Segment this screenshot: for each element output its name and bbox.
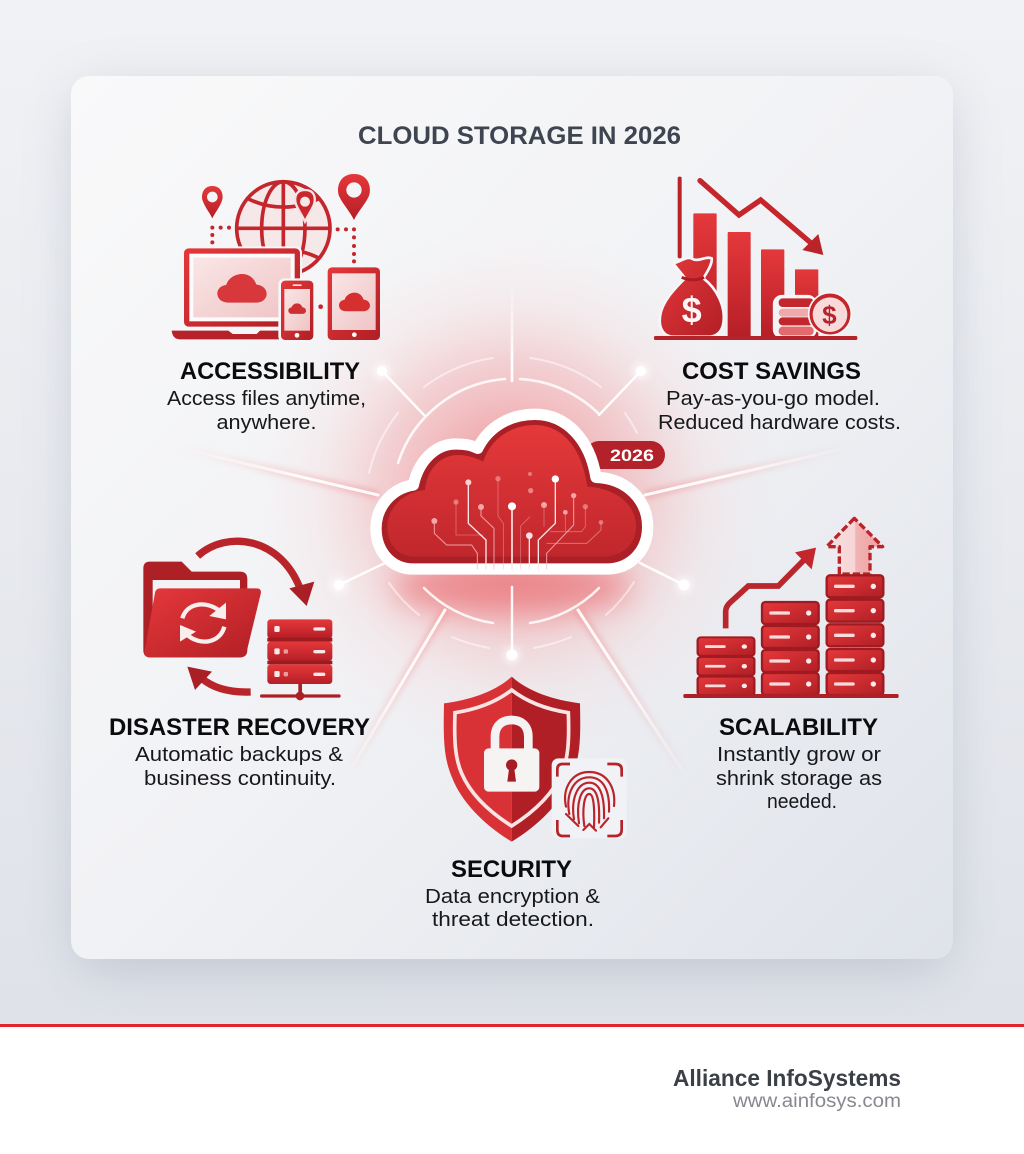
text: security description (425, 885, 600, 931)
globe (237, 182, 330, 275)
laptop (182, 246, 302, 329)
growth arrow (726, 560, 804, 628)
footer brand name: Alliance InfoSystems (673, 1065, 901, 1091)
icon: cost savings chart (654, 177, 857, 340)
server stack (267, 619, 332, 684)
heading: cost savings: COST SAVINGS (682, 358, 861, 385)
left ray (179, 448, 378, 495)
lower-right long ray (578, 610, 682, 770)
lower-left long ray (352, 610, 445, 767)
main card (71, 76, 953, 959)
text: cost savings description: Pay-as-you-go model. (666, 387, 880, 410)
rays and connector lines (179, 285, 846, 770)
text: disaster recovery description: business continuity. (144, 767, 336, 790)
base line (654, 336, 857, 340)
tablet (328, 267, 380, 340)
heading: security: SECURITY (451, 856, 572, 883)
ray halos (179, 448, 846, 770)
text: accessibility description: anywhere. (216, 411, 316, 434)
axis and baseline (678, 177, 682, 258)
fingerprint card (552, 758, 627, 838)
text: scalability description: Instantly grow or (717, 743, 881, 766)
text: cost savings description (658, 387, 901, 434)
title: CLOUD STORAGE IN 2026 (358, 122, 681, 150)
pin centre (295, 190, 315, 222)
node dots (331, 363, 692, 663)
shield (444, 677, 512, 842)
heading: disaster recovery: DISASTER RECOVERY (109, 714, 370, 741)
icon: accessibility devices (172, 174, 380, 342)
text: cost savings description: Reduced hardware costs. (658, 411, 901, 434)
connector dots (210, 226, 356, 309)
icon: disaster recovery (143, 541, 341, 700)
money bag (660, 258, 724, 337)
year badge (585, 441, 665, 469)
year badge: 2026 (610, 446, 654, 465)
heading: scalability: SCALABILITY (719, 714, 878, 741)
central hub glow (247, 230, 777, 760)
short node rays (339, 371, 684, 655)
pin left (202, 186, 223, 218)
coin (809, 293, 851, 335)
card shadow (76, 92, 948, 970)
curved arrows (198, 541, 300, 692)
text: disaster recovery description (135, 743, 343, 790)
base line (683, 694, 899, 698)
icon: cost savings chart: $ (822, 300, 837, 330)
text: disaster recovery description: Automatic backups & (135, 743, 343, 766)
right ray (645, 448, 846, 495)
dollar sign on bag: $ (682, 290, 702, 331)
text: accessibility description (167, 387, 366, 434)
central cloud (376, 414, 648, 569)
icon: scalability (683, 518, 899, 698)
text: scalability description: shrink storage as (716, 767, 882, 790)
folder (143, 562, 247, 657)
bars (693, 213, 818, 337)
text: accessibility description: Access files anytime, (167, 387, 366, 410)
footer red rule (0, 1024, 1024, 1027)
server stacks (698, 575, 883, 695)
text: security description: Data encryption & (425, 885, 600, 908)
falling arrow (700, 181, 813, 245)
top ray (511, 285, 513, 381)
sync arrows (182, 604, 224, 642)
text: scalability description: needed. (767, 790, 837, 813)
dashed up arrow (827, 518, 883, 574)
footer URL: www.ainfosys.com (732, 1091, 901, 1112)
coin stack (774, 296, 816, 337)
text: security description: threat detection. (432, 908, 594, 931)
heading: accessibility: ACCESSIBILITY (180, 358, 360, 385)
text: scalability description (716, 743, 882, 813)
padlock (495, 720, 528, 750)
icon: security shield (444, 677, 627, 842)
phone (278, 278, 316, 342)
cloud circuit traces (431, 472, 603, 569)
ring arcs (398, 379, 599, 623)
outer ring arcs (369, 358, 637, 648)
glow beneath cloud (392, 562, 632, 614)
pin right (338, 174, 370, 220)
footer band (0, 1027, 1024, 1154)
